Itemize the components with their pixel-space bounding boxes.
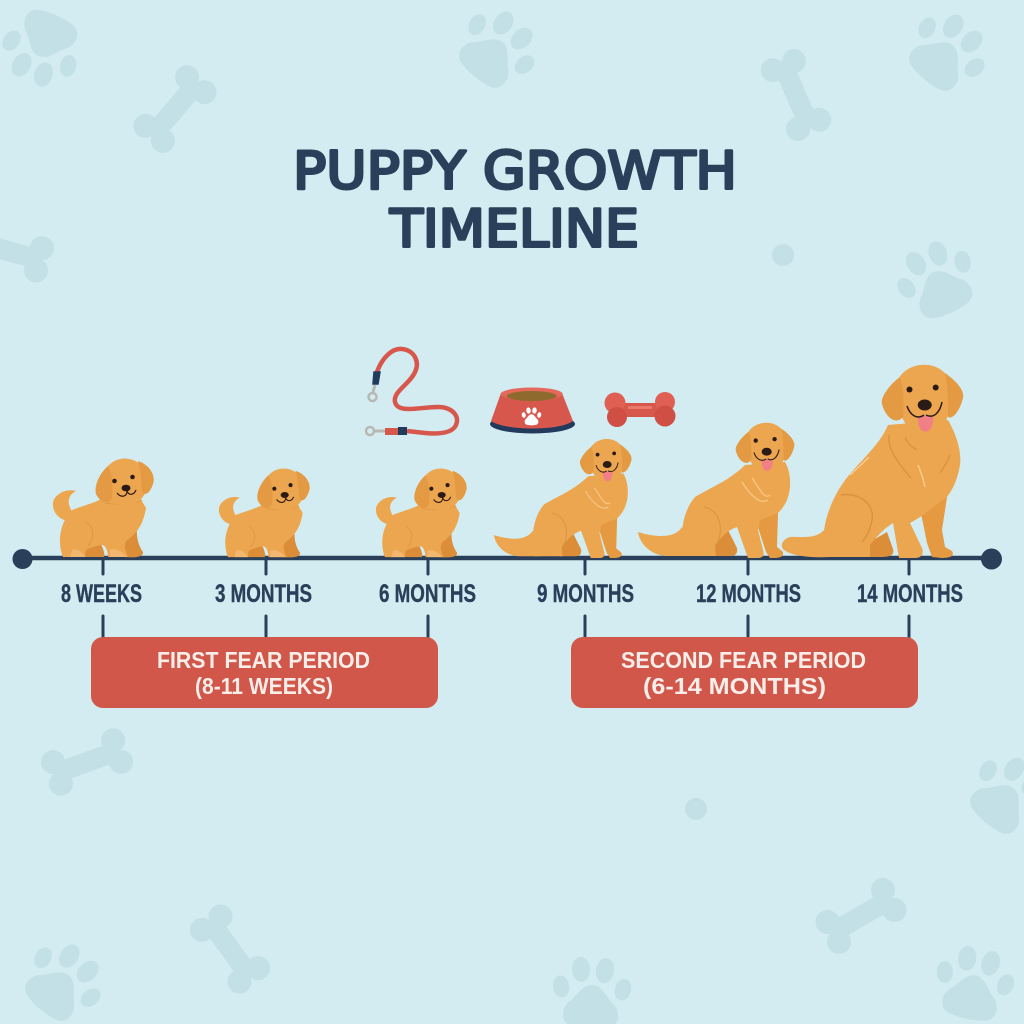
age labels: 6 MONTHS bbox=[379, 580, 476, 608]
age labels bbox=[61, 580, 963, 608]
dog: 9 months bbox=[494, 439, 632, 558]
timeline axis bbox=[12, 548, 1002, 637]
age labels: 9 MONTHS bbox=[537, 580, 634, 608]
dog: 8 weeks bbox=[53, 458, 154, 557]
dog: 3 months bbox=[219, 468, 310, 557]
title: TIMELINE bbox=[389, 200, 639, 260]
dog: 14 months bbox=[782, 365, 963, 558]
callout: first fear period: FIRST FEAR PERIOD bbox=[157, 647, 370, 673]
dog: 6 months bbox=[376, 468, 467, 557]
callout: first fear period: (8-11 WEEKS) bbox=[195, 673, 333, 699]
title bbox=[293, 142, 737, 260]
callout: second fear period: (6-14 MONTHS) bbox=[643, 673, 826, 699]
age labels: 3 MONTHS bbox=[215, 580, 312, 608]
callout: second fear period bbox=[571, 637, 918, 708]
dog: 12 months bbox=[638, 423, 794, 558]
callout: first fear period bbox=[91, 637, 438, 708]
icon: food bowl bbox=[490, 388, 575, 434]
icon: chew bone bbox=[604, 392, 676, 427]
callout: second fear period: SECOND FEAR PERIOD bbox=[621, 647, 866, 673]
age labels: 8 WEEKS bbox=[61, 580, 142, 608]
age labels: 12 MONTHS bbox=[696, 580, 801, 608]
title: PUPPY GROWTH bbox=[293, 142, 737, 202]
age labels: 14 MONTHS bbox=[857, 580, 963, 608]
icon: leash bbox=[366, 349, 457, 435]
